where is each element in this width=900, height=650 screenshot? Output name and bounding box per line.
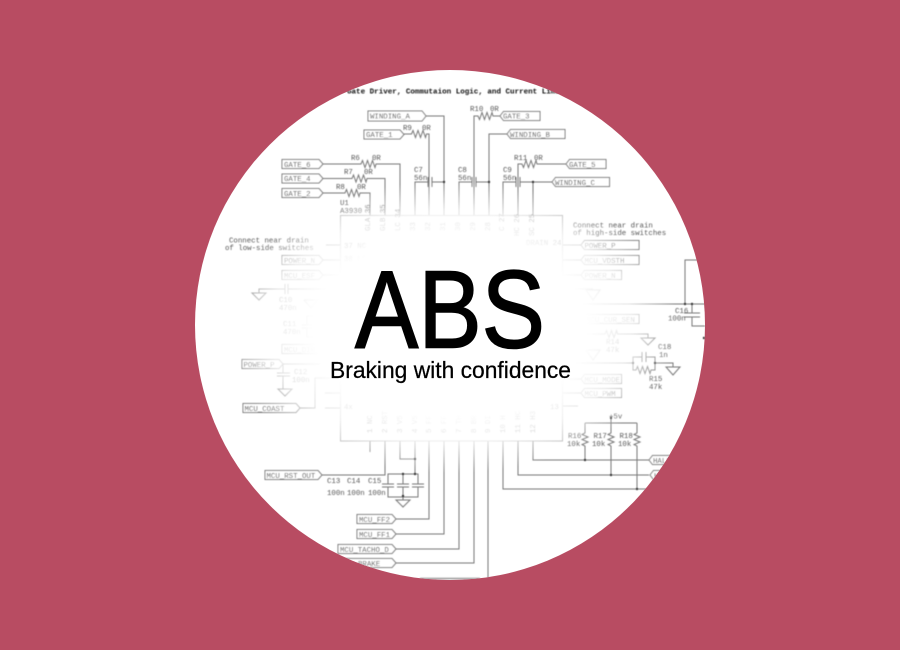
top signal tags: GATE_3 (503, 114, 530, 122)
bottom strip (420, 578, 480, 580)
top junction dots (443, 181, 534, 183)
top component values: 0R (357, 184, 366, 192)
top component values: 56n (503, 175, 516, 183)
IC pin labels: 2 RST (382, 410, 390, 433)
bottom signal tags (265, 470, 396, 569)
IC pin labels: 30 (455, 222, 463, 231)
bottom capacitor values: C13 (327, 478, 340, 486)
right side values (526, 240, 688, 412)
top component values: R8 (336, 184, 345, 192)
IC pin labels: 1 NC (367, 415, 375, 433)
hall signal tags: HALL_A (653, 458, 680, 466)
bottom capacitor values: C14 (347, 478, 361, 486)
bottom junction dots (402, 458, 416, 497)
hall junction dots (584, 417, 638, 490)
top signal tags (282, 111, 610, 199)
left side values: 470n (283, 329, 301, 337)
top signal tags: WINDING_B (510, 132, 550, 140)
right side values: R14 (606, 339, 620, 347)
left side values: 470n (279, 305, 297, 313)
bottom signal tags: MCU_FF2 (359, 517, 390, 525)
IC U1 outline (340, 216, 562, 441)
hall signal tags: HALL_B (654, 473, 681, 481)
right side values: C18 (658, 344, 671, 352)
top component values: C7 (414, 167, 423, 175)
IC pin labels: GLB 35 (380, 204, 388, 231)
left side capacitors and grounds (252, 284, 340, 408)
top signal tags: WINDING_C (555, 180, 595, 188)
pull-up values (567, 414, 633, 449)
hall signal tags (648, 454, 670, 480)
right side values: 47k (649, 384, 663, 392)
left side signals: MCU_ESF (284, 273, 315, 281)
right side values: 100n (668, 316, 686, 324)
right side signals: MCU_VDSTH (584, 258, 624, 266)
IC pin labels: 11 HC (515, 410, 523, 433)
right side junction dots (632, 303, 705, 364)
left side signals: MCU_COAST (244, 406, 285, 414)
white circle panel (195, 70, 705, 580)
IC U1 label: U1 (340, 200, 349, 208)
hall signal wiring (503, 441, 650, 489)
top component values: 0R (422, 125, 431, 133)
top component values: C8 (458, 167, 467, 175)
IC pin labels: 29 (470, 222, 478, 231)
IC pin labels: 32 (425, 222, 433, 231)
top wiring and resistors (322, 112, 581, 275)
circuit schematic (222, 88, 705, 582)
note: low-side switches: of low-side switches (225, 245, 314, 253)
IC pin labels: 28 (485, 222, 493, 231)
note: high-side switches: Connect near drain (573, 222, 653, 230)
infographic canvas (195, 70, 705, 580)
top component values: R6 (351, 155, 360, 163)
right side values: DRAIN 24 (526, 240, 562, 248)
top component values: 56n (414, 175, 427, 183)
pull-up values: +5v (609, 414, 623, 422)
top component values (336, 106, 543, 192)
pull-up values: 10k (618, 441, 632, 449)
top component values: 56n (458, 175, 471, 183)
top component values: R11 (514, 155, 528, 163)
left side signals: POWER_N (284, 258, 315, 266)
top component values: 0R (534, 155, 543, 163)
left side values: 37 NC (344, 243, 367, 251)
top component values: C9 (503, 167, 512, 175)
IC pin labels: 12 H3 (530, 411, 538, 433)
pull-up values: R16 (568, 433, 581, 441)
IC pin labels: 9 DI (485, 415, 493, 433)
bottom signal tags: BRAKE (358, 561, 381, 569)
bottom wiring (322, 441, 488, 582)
bottom capacitor values (327, 478, 386, 498)
pull-up values: 10k (567, 441, 581, 449)
right side signals: MCU_PWM (584, 391, 616, 399)
left side values: 100n (292, 377, 310, 385)
IC pin labels: 33 (410, 222, 418, 231)
bottom signal tags: MCU_FF1 (359, 532, 391, 540)
IC pin labels: 5 FF (426, 415, 434, 433)
pull-up values: 10k (592, 441, 606, 449)
IC U1 label: A3930 (340, 208, 362, 216)
IC pin labels (365, 204, 538, 433)
pull-up resistors (582, 418, 640, 489)
bottom signal tags: MCU_RST_OUT (266, 473, 316, 481)
top component values: R7 (344, 169, 353, 177)
schematic title: Gate Driver, Commutaion Logic, and Current Limit (347, 88, 564, 96)
top signal tags: GATE_4 (284, 176, 311, 184)
note: low-side switches: Connect near drain (229, 238, 309, 246)
left side values: C10 (279, 297, 292, 305)
IC pin labels: GLA 36 (365, 204, 373, 231)
IC pin labels: SC 25 (529, 214, 537, 236)
IC pin labels: 7 TH (456, 415, 464, 433)
bottom capacitor values: 100n (347, 490, 365, 498)
bottom capacitor values: 100n (368, 490, 386, 498)
top signal tags: GATE_6 (284, 162, 311, 170)
top component values: 0R (490, 106, 499, 114)
IC pin labels: LC 34 (395, 208, 403, 231)
right side signals: MCU_MODE (584, 377, 621, 385)
IC pin labels: 3 V5 (397, 415, 405, 433)
note: high-side switches: of high-side switches (573, 230, 666, 238)
top signal tags: WINDING_A (370, 114, 410, 122)
right side values: 1n (659, 352, 668, 360)
subtitle: Braking with confidence (330, 357, 571, 383)
top signal tags: GATE_2 (284, 191, 311, 199)
right side signals: POWER_P (584, 243, 616, 251)
pull-up values: R18 (620, 433, 633, 441)
right side signals: MCU_CUR_SEN (586, 317, 635, 325)
top component values: R10 (470, 106, 483, 114)
right side values: 47k (606, 347, 620, 355)
right side values: R15 (649, 376, 662, 384)
bottom signal tags: MCU_TACHO_D (340, 547, 389, 555)
right side signals (581, 240, 639, 399)
bottom capacitor values: 100n (327, 490, 345, 498)
IC pin labels: 4 V5 (412, 415, 420, 433)
left side values: 38 LS (344, 256, 367, 264)
left side signals: MCU_DIR (284, 347, 316, 355)
right side values: C16 (675, 308, 688, 316)
top component values: 0R (372, 155, 381, 163)
IC pin labels: 10 H (500, 415, 508, 433)
top signal tags: GATE_1 (366, 132, 393, 140)
IC pin labels: 6 FF (441, 415, 449, 433)
bottom capacitor values: C15 (368, 478, 381, 486)
title: ABS: ABS (355, 248, 545, 372)
right side components (563, 260, 705, 406)
IC pin labels: C 27 (499, 213, 507, 231)
left side signals: POWER_P (244, 362, 275, 370)
IC pin labels: 31 (440, 222, 448, 231)
IC pin labels: HC 26 (514, 214, 522, 236)
right side values: 13 (550, 404, 559, 412)
left side values (279, 243, 367, 412)
central white fade (222, 181, 678, 473)
right side signals: POWER_N (584, 273, 616, 281)
IC pin labels: 8 BR (471, 415, 479, 433)
left side values: C11 (283, 321, 297, 329)
left side signals (242, 256, 323, 414)
left side values: 4x (344, 404, 353, 412)
pull-up values: R17 (594, 433, 607, 441)
top signal tags: GATE_5 (569, 162, 596, 170)
top component values: 0R (364, 169, 373, 177)
top component values: R9 (403, 125, 412, 133)
left side values: C12 (294, 369, 307, 377)
